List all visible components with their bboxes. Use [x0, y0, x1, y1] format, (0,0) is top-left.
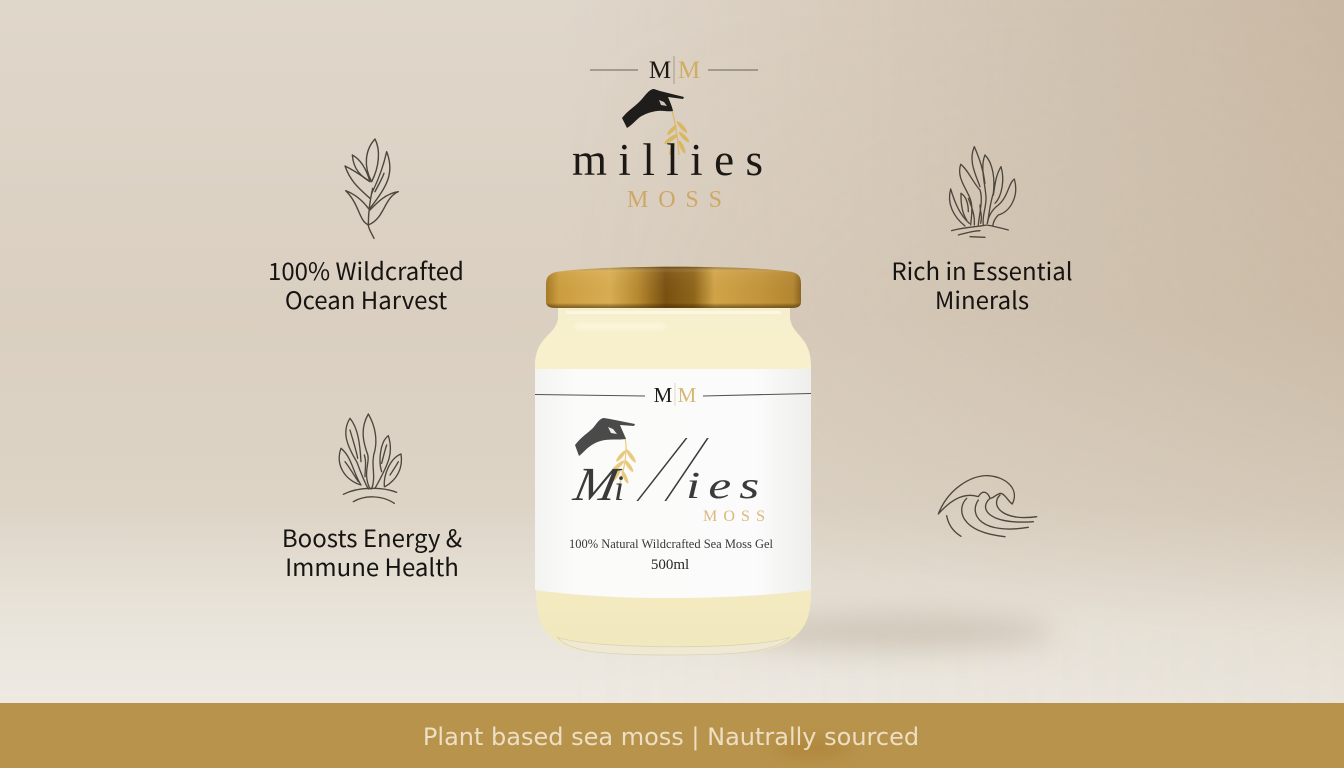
feature text: minerals: Rich in Essential — [891, 252, 1073, 287]
label sub wordmark: MOSS — [703, 508, 765, 525]
label monogram — [535, 383, 811, 407]
label script wordmark: M — [569, 458, 626, 511]
feature text: wildcrafted: Ocean Harvest — [285, 281, 447, 316]
monogram: M — [649, 57, 671, 84]
jar label — [535, 369, 811, 598]
icon: seaweed on mound — [339, 414, 401, 503]
top brand logo — [572, 56, 763, 213]
feature text: energy: Boosts Energy & — [282, 519, 462, 554]
feature text: energy: Immune Health — [285, 548, 459, 583]
label description: 100% Natural Wildcrafted Sea Moss Gel — [569, 537, 774, 551]
label script wordmark: l — [620, 422, 701, 520]
icon: seaweed cluster — [949, 147, 1016, 237]
feature text: minerals: Minerals — [935, 281, 1029, 316]
jar lid — [546, 267, 801, 308]
bottom banner — [0, 703, 1344, 768]
monogram — [590, 56, 758, 84]
icon: leaf sprig — [345, 139, 398, 238]
label script wordmark — [569, 422, 767, 521]
label script wordmark: ies — [686, 464, 767, 506]
label monogram: M — [654, 383, 673, 407]
monogram: M — [678, 57, 700, 84]
icon: hand holding sprig — [622, 89, 690, 156]
label volume: 500ml — [651, 557, 689, 573]
jar glass body — [535, 306, 811, 655]
label monogram: M — [678, 383, 697, 407]
label hand and sprig — [575, 418, 637, 487]
label script wordmark: i — [614, 468, 624, 508]
jar shadow — [735, 614, 1055, 650]
feature text: wildcrafted: 100% Wildcrafted — [268, 252, 464, 287]
banner text: Plant based sea moss | Nautrally sourced — [423, 723, 919, 751]
product jar — [535, 267, 811, 655]
icon: wave — [938, 476, 1037, 537]
sub wordmark: MOSS — [627, 187, 722, 213]
label script wordmark: l — [650, 423, 720, 521]
wordmark: millies — [572, 135, 763, 185]
